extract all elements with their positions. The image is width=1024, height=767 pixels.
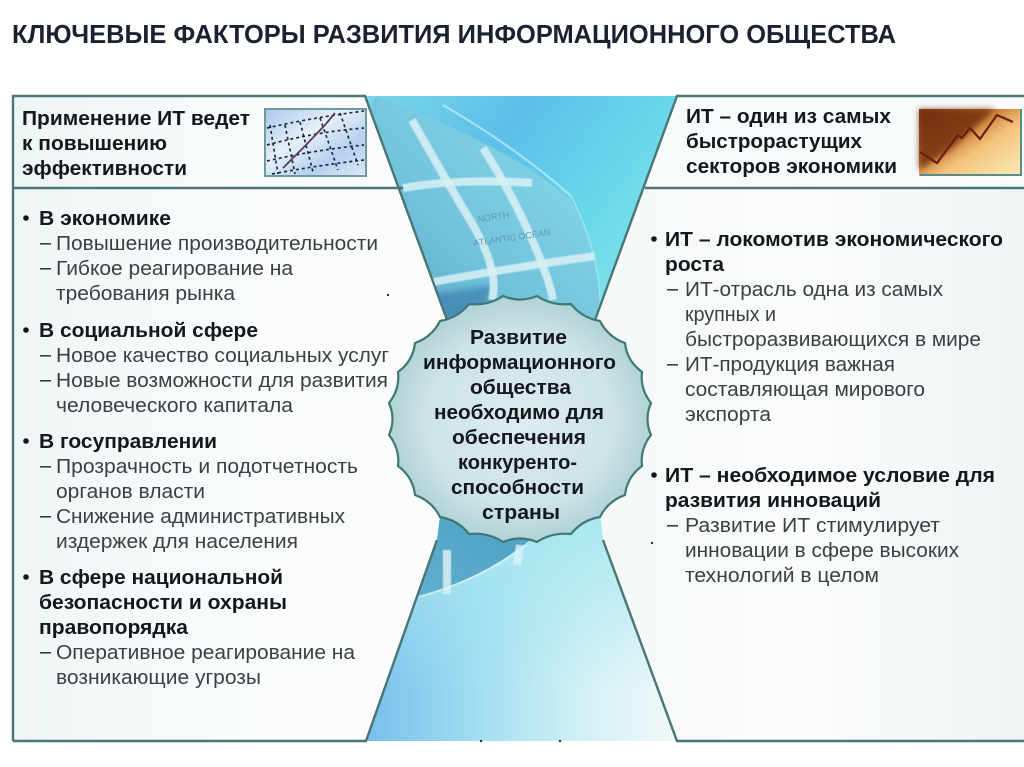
text block: IT as locomotive of growth: составляющая мирового bbox=[685, 379, 925, 401]
text block: IT as locomotive of growth: ИТ-отрасль одна из самых bbox=[685, 279, 943, 301]
panel: left background bbox=[13, 96, 443, 741]
panel: left header text bbox=[22, 108, 250, 180]
panel: left header text: к повышению bbox=[22, 133, 167, 155]
panel: right header text bbox=[686, 106, 897, 178]
text block: IT as locomotive of growth: быстроразвивающихся в мире bbox=[685, 329, 981, 351]
text block: in the economy bbox=[23, 208, 378, 305]
central globe image: ATLANTIC OCEAN bbox=[473, 227, 551, 248]
text block: IT as locomotive of growth: роста bbox=[665, 254, 725, 276]
callout: central scalloped badge: конкуренто- bbox=[458, 452, 577, 474]
central globe image bbox=[360, 96, 680, 745]
panel: right background bbox=[590, 96, 1024, 741]
icon: grid chart picture bbox=[265, 109, 366, 176]
text block: in the social sphere: человеческого капитала bbox=[56, 395, 294, 417]
text block: IT as locomotive of growth bbox=[651, 229, 1003, 426]
title: КЛЮЧЕВЫЕ ФАКТОРЫ РАЗВИТИЯ ИНФОРМАЦИОННОГО ОБЩЕСТВА bbox=[12, 19, 896, 49]
panel: right header text: ИТ – один из самых bbox=[686, 106, 891, 128]
text block: national security: правопорядка bbox=[39, 617, 189, 639]
callout: central scalloped badge: страны bbox=[482, 502, 560, 524]
text block: IT as locomotive of growth: экспорта bbox=[685, 404, 772, 426]
text block: national security bbox=[23, 567, 356, 689]
text block: in the social sphere: В социальной сфере bbox=[39, 320, 258, 342]
text block: national security: В сфере национальной bbox=[39, 567, 283, 589]
icon: rising line chart picture bbox=[919, 109, 1021, 176]
text block: IT as condition for innovation bbox=[651, 465, 995, 587]
panel: left header text: эффективности bbox=[22, 158, 187, 180]
text block: in the economy: В экономике bbox=[39, 208, 171, 230]
text block: national security: Оперативное реагирование на bbox=[56, 642, 356, 664]
callout: central scalloped badge: способности bbox=[451, 477, 584, 499]
text block: IT as locomotive of growth: крупных и bbox=[685, 304, 776, 326]
text block: in the social sphere: Новое качество социальных услуг bbox=[56, 345, 389, 367]
callout: central scalloped badge: Развитие bbox=[470, 327, 567, 349]
text block: IT as locomotive of growth: ИТ-продукция важная bbox=[685, 354, 895, 376]
panel: right header text: секторов экономики bbox=[686, 156, 897, 178]
text block: in the economy: Повышение производительности bbox=[56, 233, 378, 255]
panel: left header text: Применение ИТ ведет bbox=[22, 108, 250, 130]
text block: IT as condition for innovation: Развитие ИТ стимулирует bbox=[685, 515, 940, 537]
text block: in the social sphere bbox=[23, 320, 389, 417]
text block: in public administration: органов власти bbox=[56, 481, 205, 503]
text block: in public administration bbox=[23, 431, 358, 553]
panel: right header text: быстрорастущих bbox=[686, 131, 862, 153]
text block: national security: безопасности и охраны bbox=[39, 592, 287, 614]
text block: IT as condition for innovation: ИТ – необходимое условие для bbox=[665, 465, 995, 487]
text block: IT as condition for innovation: инновации в сфере высоких bbox=[685, 540, 959, 562]
callout: central scalloped badge: необходимо для bbox=[434, 402, 604, 424]
text block: in public administration: издержек для населения bbox=[56, 531, 298, 553]
callout: central scalloped badge bbox=[389, 296, 651, 542]
text block: IT as locomotive of growth: ИТ – локомотив экономического bbox=[665, 229, 1003, 251]
text block: in the social sphere: Новые возможности для развития bbox=[56, 370, 388, 392]
callout: central scalloped badge: информационного bbox=[423, 352, 616, 374]
text block: IT as condition for innovation: развития инноваций bbox=[665, 490, 881, 512]
text block: in public administration: Снижение административных bbox=[56, 506, 345, 528]
text block: IT as condition for innovation: технологий в целом bbox=[685, 565, 879, 587]
text block: in public administration: Прозрачность и подотчетность bbox=[56, 456, 358, 478]
text block: national security: возникающие угрозы bbox=[56, 667, 261, 689]
callout: central scalloped badge: обеспечения bbox=[452, 427, 586, 449]
callout: central scalloped badge: общества bbox=[470, 377, 572, 399]
text block: in public administration: В госуправлении bbox=[39, 431, 217, 453]
text block: in the economy: Гибкое реагирование на bbox=[56, 258, 294, 280]
central globe image: NORTH bbox=[477, 210, 510, 224]
text block: in the economy: требования рынка bbox=[56, 283, 236, 305]
